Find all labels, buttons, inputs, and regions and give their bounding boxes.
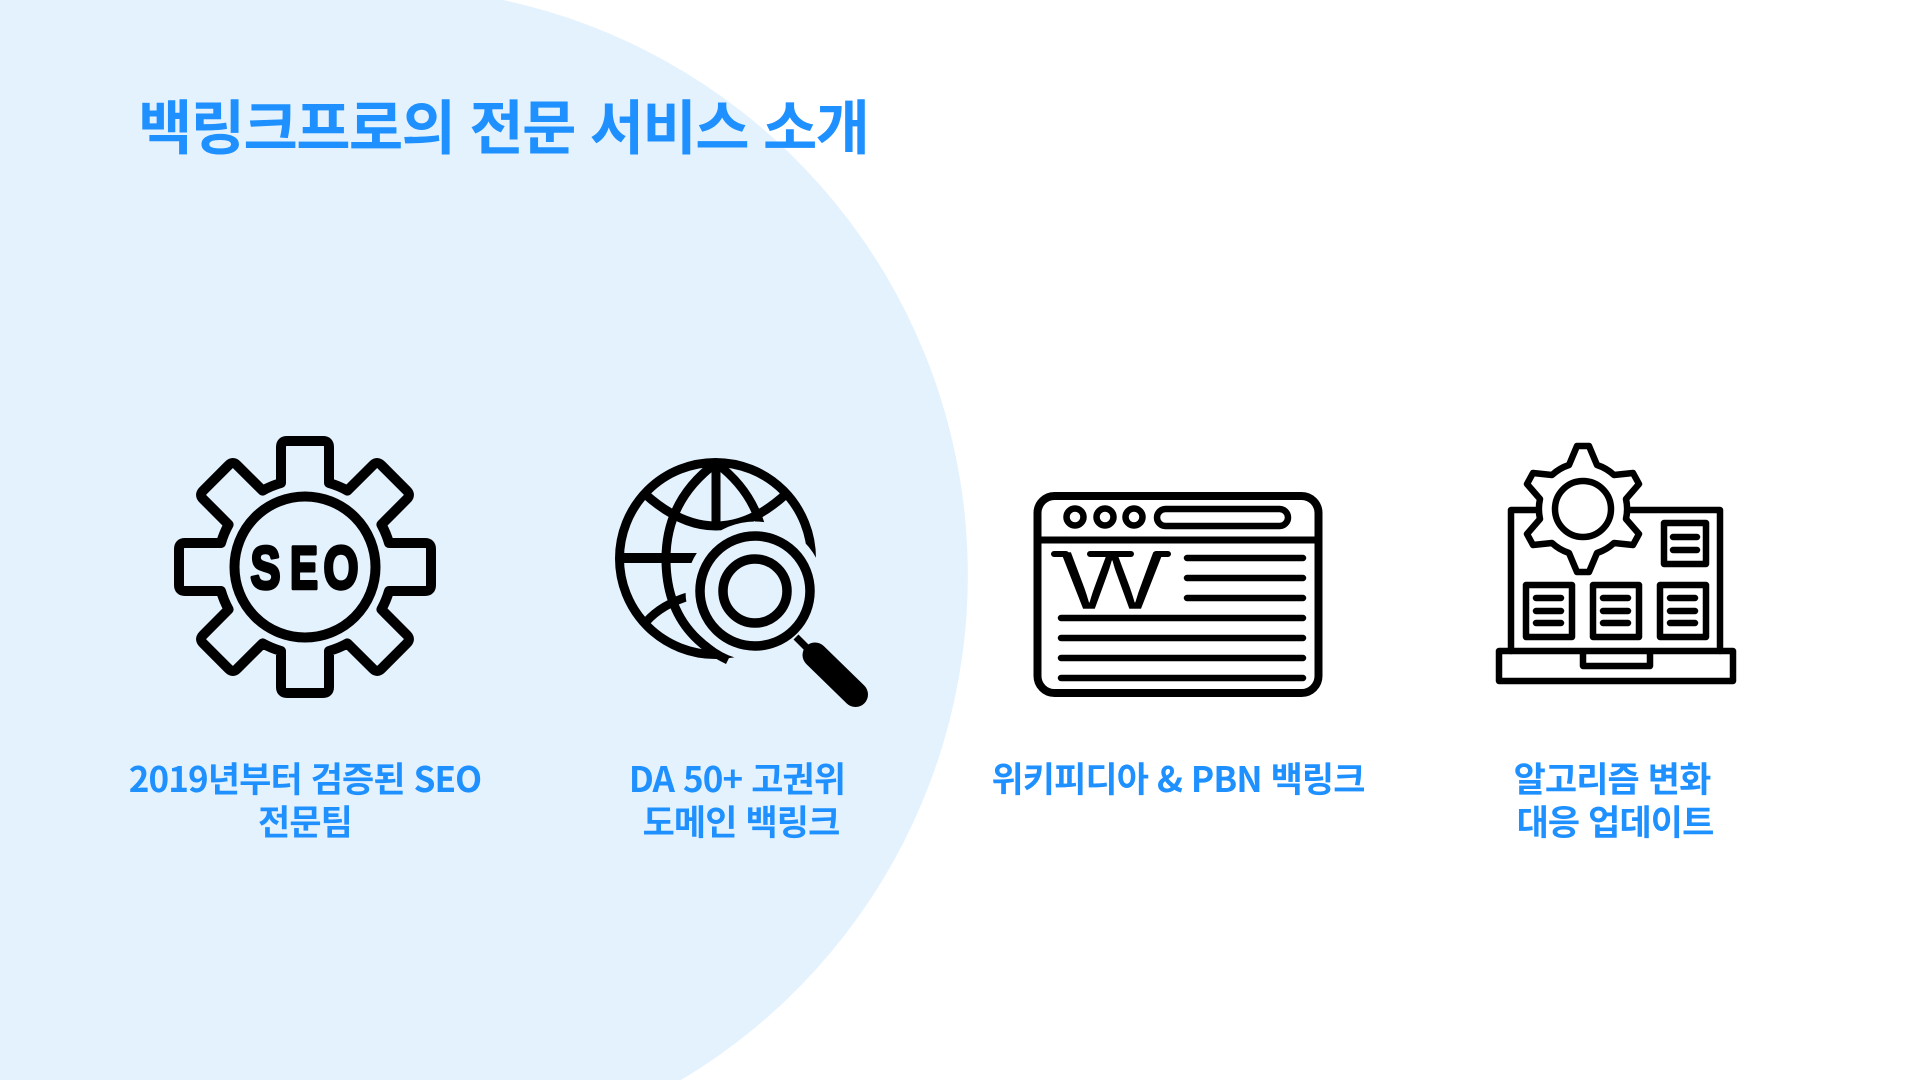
icon: laptop with gear and documents [1499,446,1733,681]
icon: SEO gear: E [290,534,318,602]
label: SEO team: 전문팀 [258,794,352,846]
icon: SEO gear: S [250,534,280,602]
icon: Wikipedia browser window: W [1060,534,1165,627]
icon: globe with magnifying glass [620,462,856,694]
label: algorithm updates: 대응 업데이트 [1517,794,1713,846]
label: high authority domains: DA 50+ 고권위 [629,752,845,803]
label: SEO team: 2019년부터 검증된 SEO [129,752,481,803]
label: algorithm updates: 알고리즘 변화 [1514,752,1710,803]
label: high authority domains: 도메인 백링크 [643,794,839,846]
label: algorithm updates [1514,752,1713,846]
label: Wikipedia and PBN: 위키피디아 & PBN 백링크 [991,752,1365,803]
icon: Wikipedia browser window [1038,496,1318,693]
icon: SEO gear: O [324,534,358,602]
label: SEO team [129,752,481,846]
icon: SEO gear [179,441,431,693]
title: 백링크프로의 전문 서비스 소개 [138,81,868,166]
label: high authority domains [629,752,845,846]
